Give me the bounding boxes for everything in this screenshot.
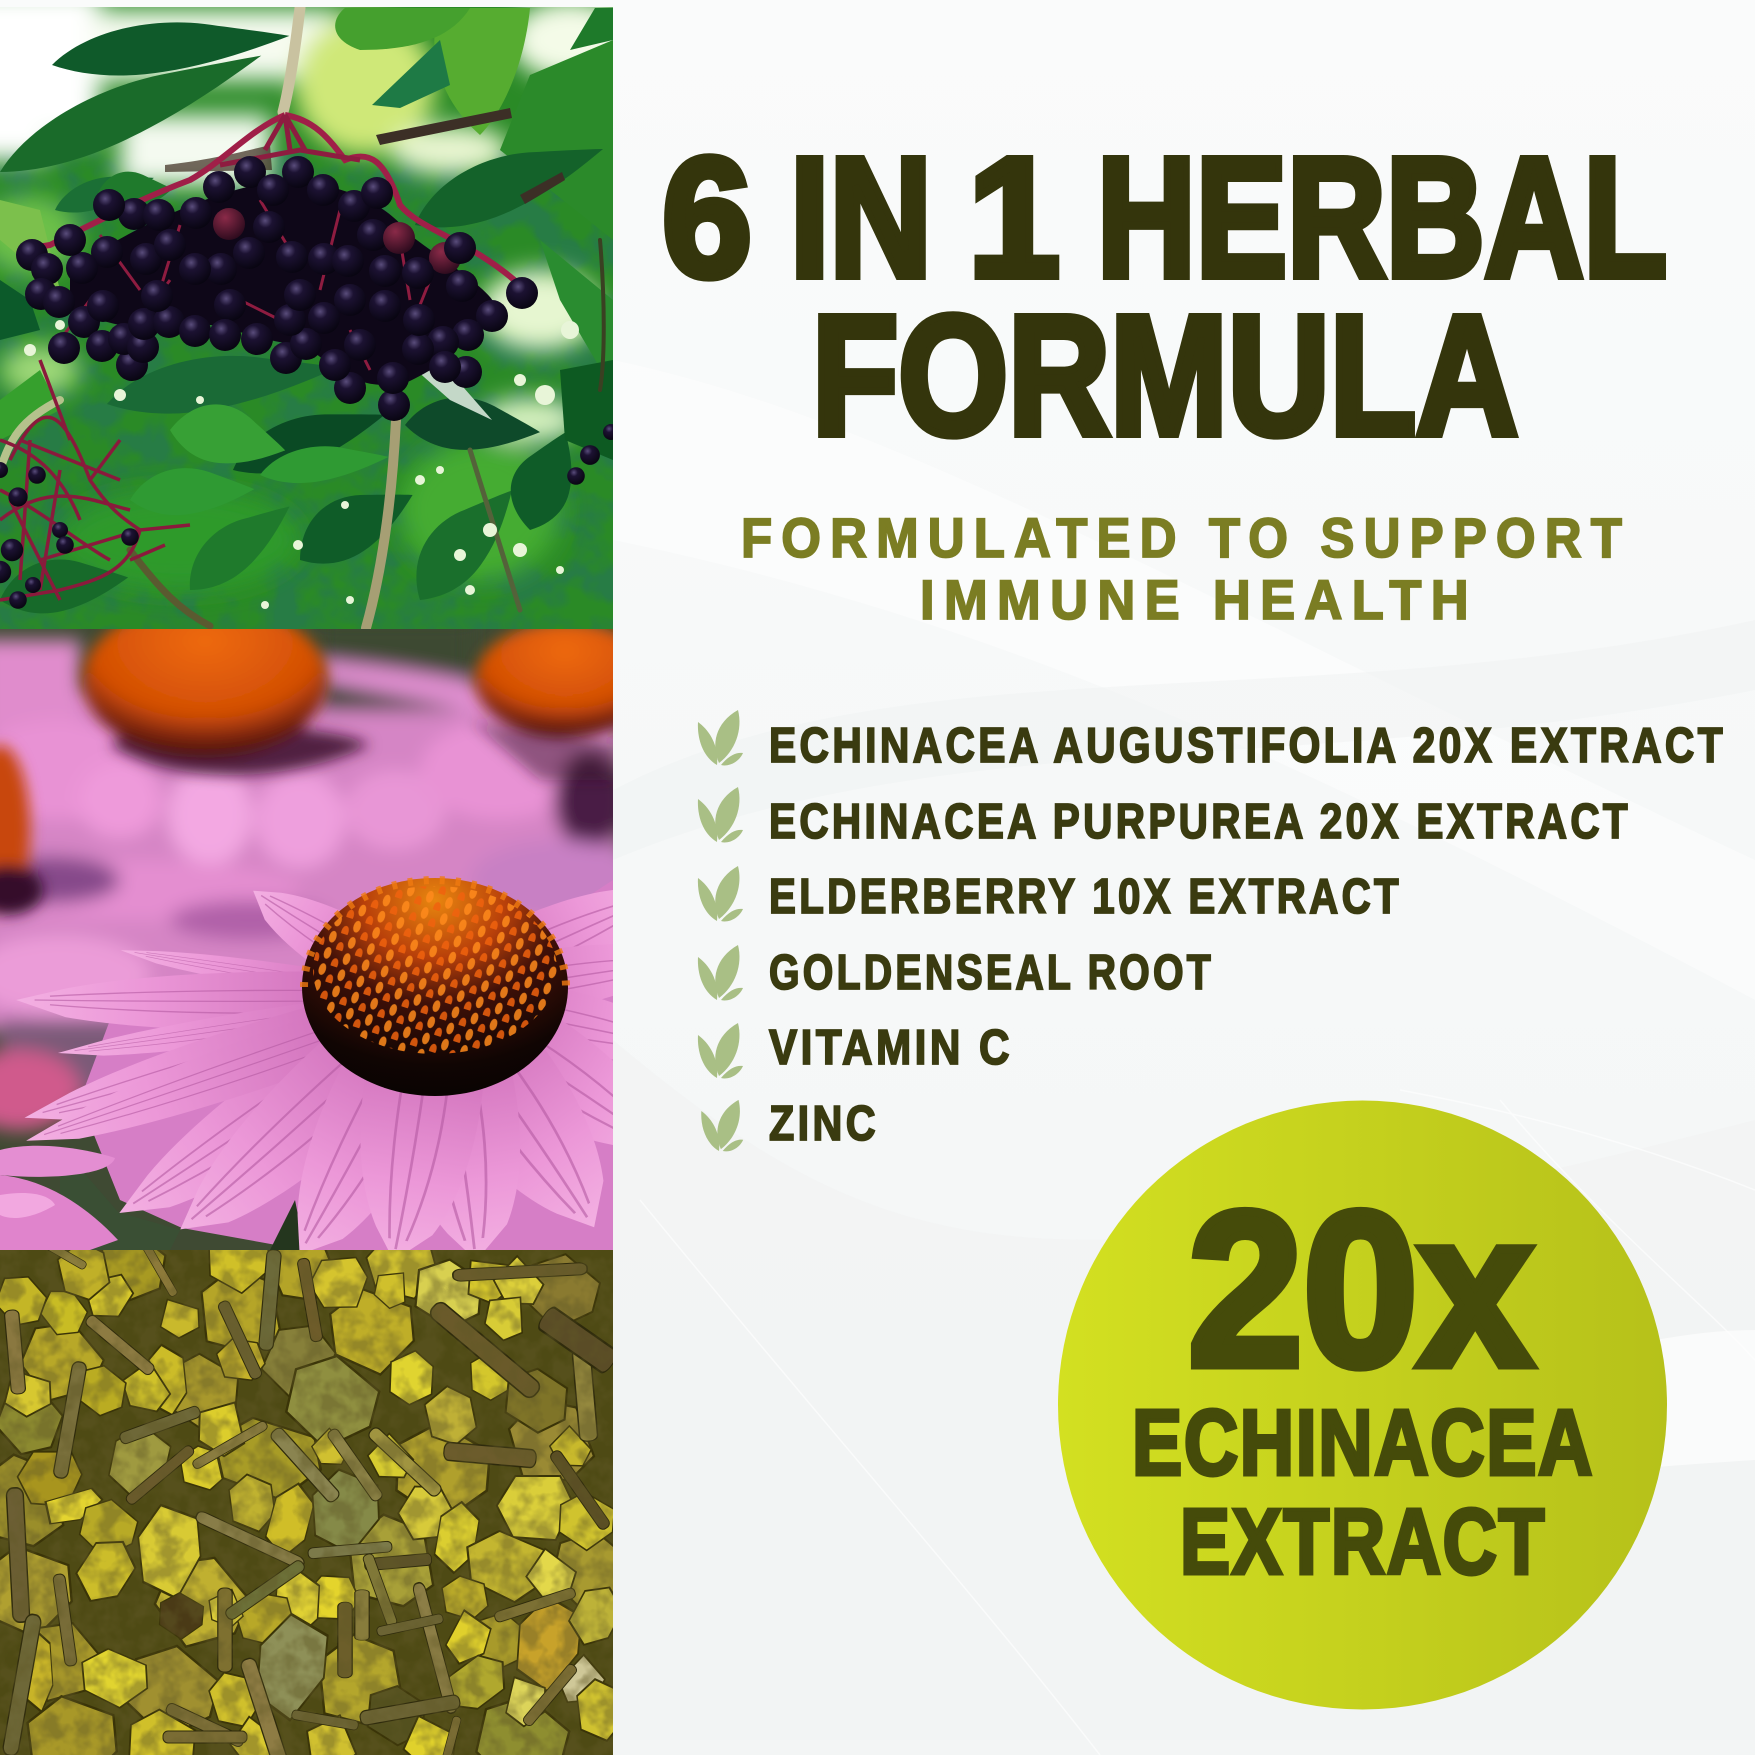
title second line: FORMULA (812, 281, 1518, 471)
photo stems (0, 8, 604, 628)
photo panel: pink echinacea flowers (0, 629, 613, 1250)
brown root sticks (2, 1234, 620, 1755)
ingredient 5: VITAMIN C (769, 1021, 1013, 1075)
badge label line 1: ECHINACEA (1132, 1390, 1594, 1494)
blurred orange flower cones (0, 629, 613, 926)
ingredient 3: ELDERBERRY 10X EXTRACT (769, 870, 1402, 924)
ingredient list (698, 710, 1726, 1151)
photo panel: goldenseal root pieces (0, 1250, 613, 1755)
icon: leaf 4 (698, 945, 743, 1000)
title: 1 (968, 123, 1060, 313)
root texture (0, 1250, 613, 1755)
badge label line 2: EXTRACT (1180, 1490, 1546, 1594)
badge number: 20x (1188, 1166, 1533, 1412)
ingredient 4: GOLDENSEAL ROOT (769, 946, 1214, 1000)
icon: leaf 3 (698, 866, 743, 921)
photo backdrop: sky and foliage light (0, 0, 630, 590)
icon: leaf 5 (698, 1023, 743, 1078)
title: IN (790, 123, 932, 313)
photo foliage noise (0, 150, 613, 630)
foreground dark gaps (270, 1200, 300, 1250)
subtitle: FORMULATED TO SUPPORT (741, 506, 1631, 569)
foreground orange cone (302, 878, 568, 1096)
specks of light through foliage (24, 320, 579, 609)
subtitle second line: IMMUNE HEALTH (920, 568, 1478, 631)
callout badge: 20x echinacea extract (1058, 1100, 1667, 1710)
photo panel: elderberries on leafy branch (0, 0, 630, 630)
flower petal skirt behind petals (80, 880, 613, 1250)
yellow root chunks (0, 1250, 613, 1755)
icon: leaf 1 (698, 710, 743, 765)
icon: leaf 6 (701, 1100, 743, 1151)
ingredient 6: ZINC (769, 1097, 879, 1151)
foreground flower petals (0, 890, 613, 1250)
second unripe cluster lower left (0, 360, 619, 609)
icon: leaf 2 (698, 787, 743, 842)
blurred back flowers (0, 620, 650, 1130)
title: 6 (662, 123, 752, 313)
photo leaves (0, 7, 613, 621)
elderberry cluster (16, 115, 538, 421)
